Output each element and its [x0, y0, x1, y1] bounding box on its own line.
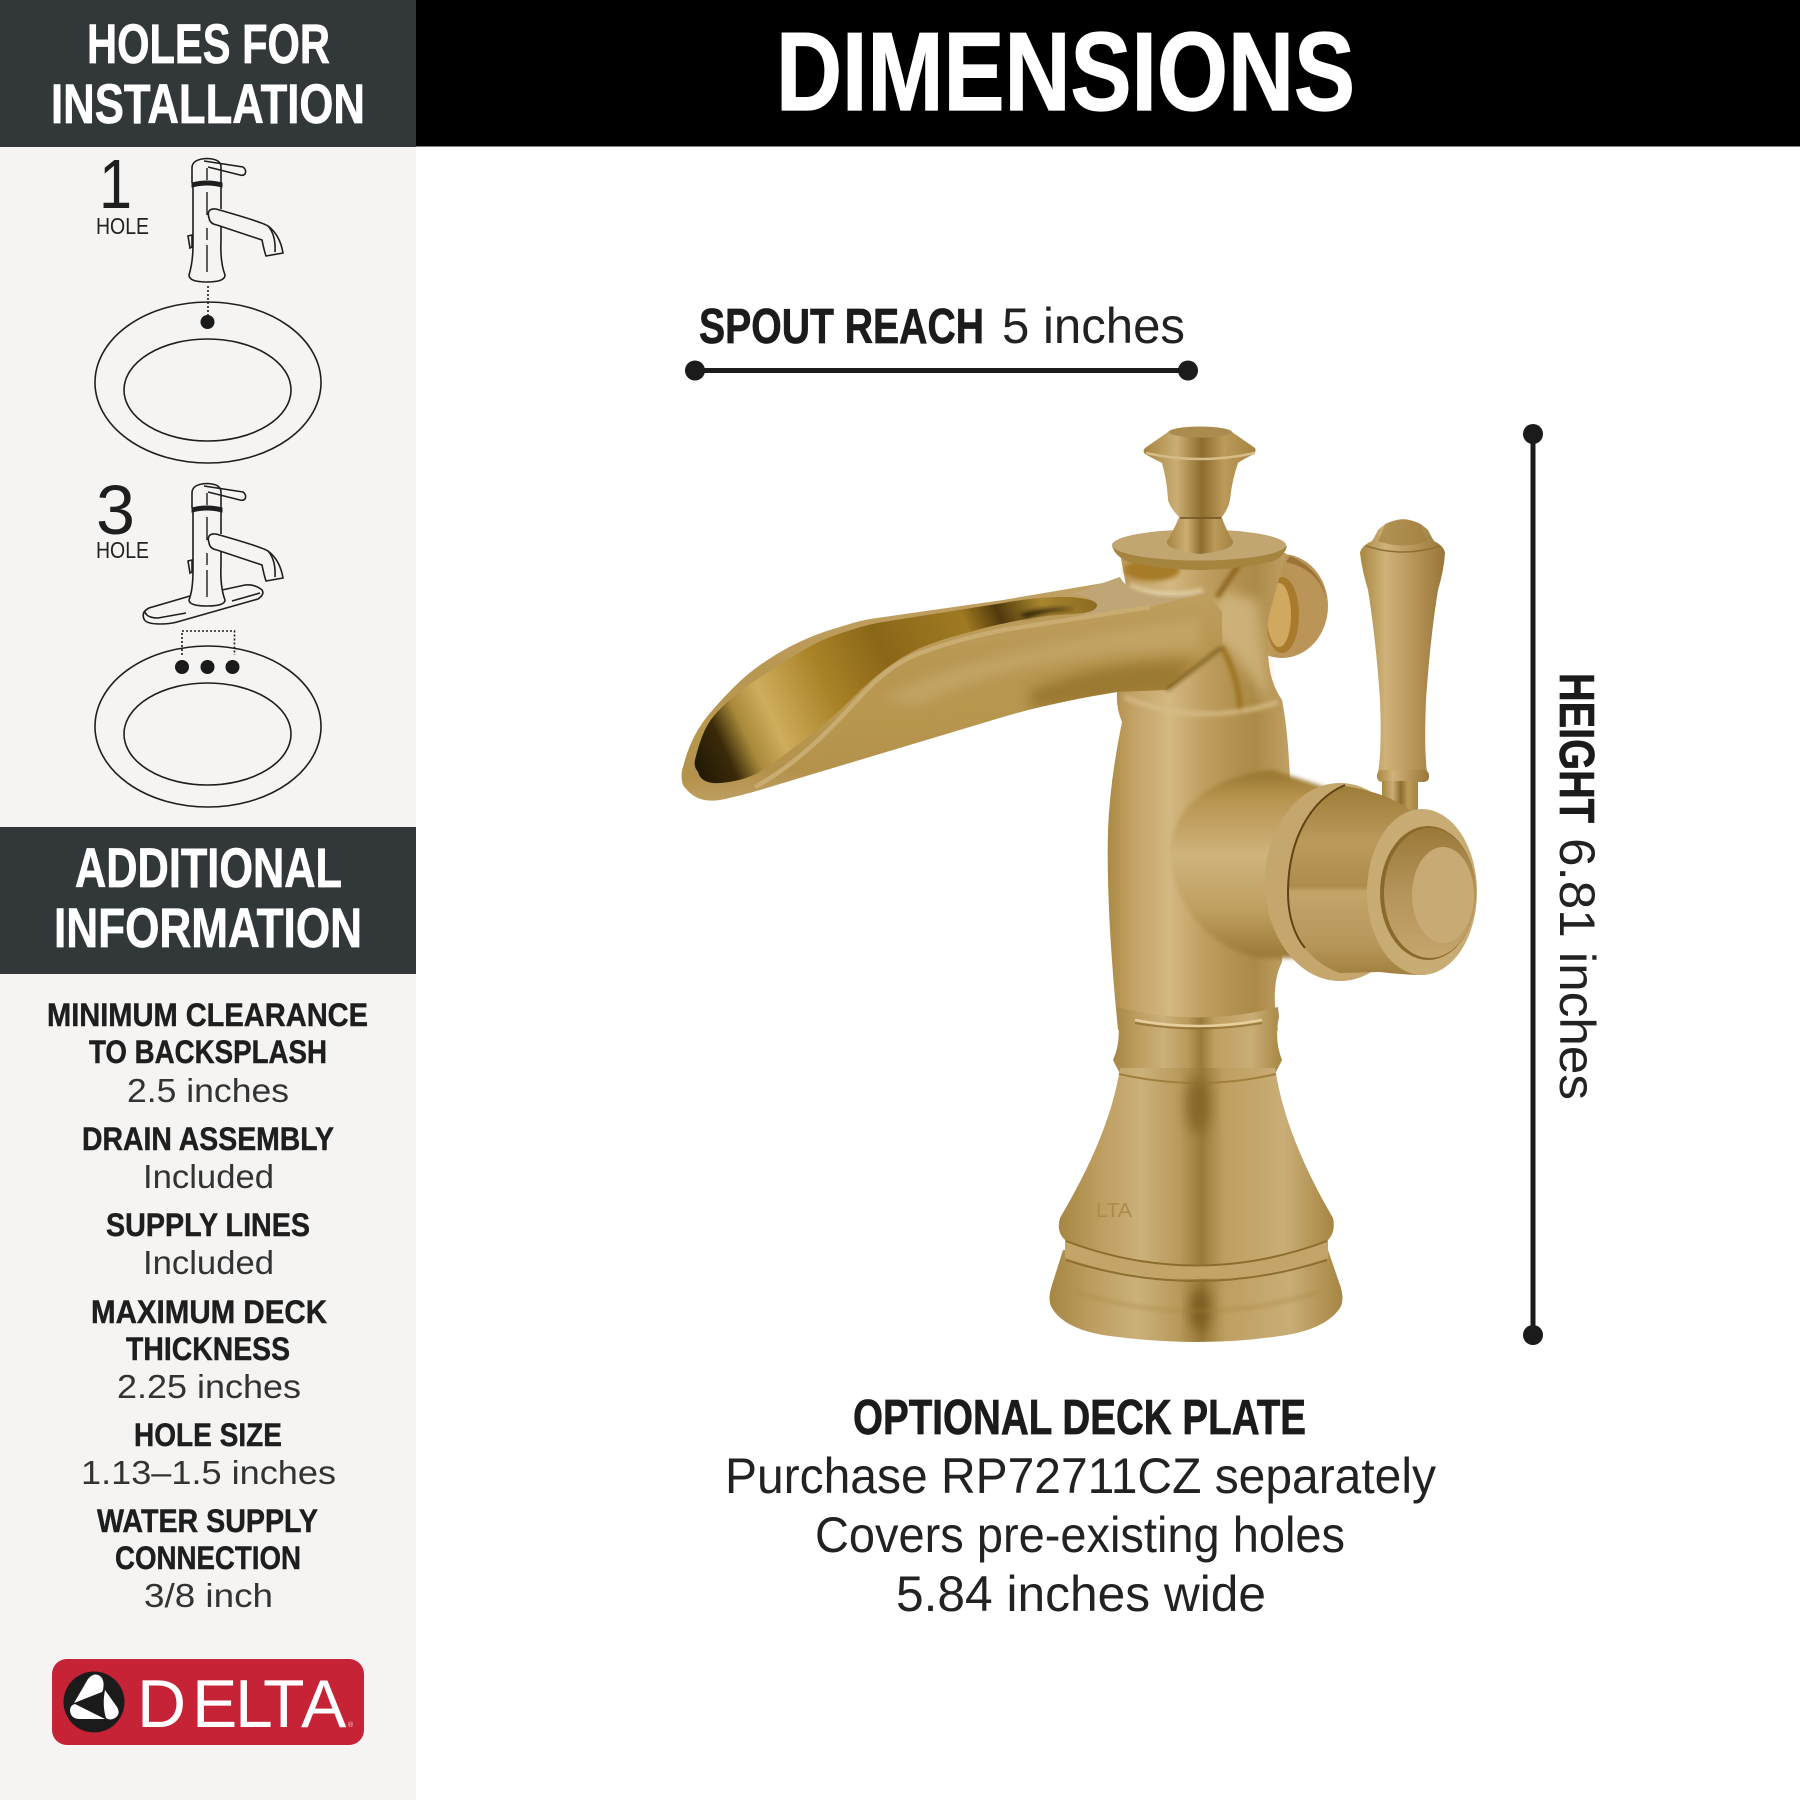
- collar and bell base: [1050, 1007, 1342, 1342]
- base shading: [1186, 1077, 1210, 1332]
- dimension: height: 6.81 inches: [1549, 838, 1605, 1100]
- text block: additional information specs: [47, 997, 368, 1614]
- text block: optional deck plate: [725, 1390, 1436, 1622]
- label: 1 hole: 1: [99, 145, 132, 223]
- spec: water supply connection: WATER SUPPLY: [97, 1503, 318, 1539]
- spec: maximum deck thickness: [91, 1294, 327, 1405]
- three hole diagram: [95, 471, 321, 807]
- icon: single hole faucet: [188, 158, 283, 315]
- label: 3 hole: [96, 471, 149, 563]
- spec: supply lines: Included: [143, 1244, 274, 1281]
- icon: sink with three holes: [95, 646, 321, 807]
- spec: supply lines: [106, 1207, 310, 1281]
- label: 1 hole: HOLE: [96, 213, 149, 239]
- collar and bell base: LTA: [1096, 1200, 1133, 1222]
- text block: optional deck plate: OPTIONAL DECK PLATE: [853, 1390, 1306, 1445]
- dimension: height: HEIGHT: [1549, 673, 1604, 823]
- label: 3 hole: HOLE: [96, 537, 149, 563]
- spout shading: [880, 618, 1200, 710]
- icon: three hole faucet with deck plate: [143, 484, 283, 655]
- spec: drain assembly: [82, 1121, 334, 1195]
- spec: water supply connection: [97, 1503, 318, 1614]
- spec: maximum deck thickness: THICKNESS: [126, 1331, 290, 1367]
- spec: supply lines: SUPPLY LINES: [106, 1207, 310, 1243]
- heading: additional information: [0, 827, 416, 974]
- spec: maximum deck thickness: 2.25 inches: [117, 1368, 301, 1405]
- foot: [1050, 1250, 1342, 1342]
- dimension: spout reach: [685, 298, 1198, 380]
- spec: minimum clearance: TO BACKSPLASH: [89, 1034, 327, 1070]
- dimension: spout reach: 5 inches: [1002, 298, 1185, 354]
- spec: minimum clearance: 2.5 inches: [127, 1072, 289, 1109]
- text block: optional deck plate: Purchase RP72711CZ separately: [725, 1448, 1436, 1504]
- top disk and finial: [1112, 426, 1287, 570]
- spec: drain assembly: Included: [143, 1158, 274, 1195]
- heading: holes for installation: HOLES FOR: [87, 12, 330, 75]
- spec: hole size: [81, 1417, 336, 1491]
- spec: minimum clearance: [47, 997, 368, 1109]
- spec: water supply connection: CONNECTION: [115, 1540, 301, 1576]
- spout: [682, 577, 1222, 801]
- spec: drain assembly: DRAIN ASSEMBLY: [82, 1121, 334, 1157]
- spec: minimum clearance: MINIMUM CLEARANCE: [47, 997, 368, 1033]
- product image: gold faucet: [682, 426, 1477, 1342]
- handle hub: [1170, 770, 1477, 981]
- ring: [1065, 1235, 1328, 1279]
- panel: left sidebar: [0, 0, 416, 1800]
- text block: optional deck plate: Covers pre-existing holes: [815, 1507, 1345, 1563]
- heading: additional information: INFORMATION: [54, 896, 362, 959]
- heading: holes for installation: INSTALLATION: [51, 72, 365, 135]
- spec: maximum deck thickness: MAXIMUM DECK: [91, 1294, 327, 1330]
- dimension: spout reach: SPOUT REACH: [699, 299, 984, 354]
- main body column and neck: [1108, 553, 1290, 1030]
- icon: sink with one hole: [95, 302, 321, 463]
- label: 3 hole: 3: [96, 471, 135, 549]
- lever handle: [1360, 519, 1445, 817]
- spec: hole size: 1.13–1.5 inches: [81, 1454, 336, 1491]
- logo: Delta: ®: [348, 1721, 354, 1729]
- logo: Delta: DELTA: [137, 1666, 347, 1742]
- back knob: [1236, 554, 1328, 658]
- spec: water supply connection: 3/8 inch: [144, 1577, 273, 1614]
- one hole diagram: [95, 145, 321, 463]
- title bar: dimensions: DIMENSIONS: [776, 10, 1355, 134]
- heading: additional information: ADDITIONAL: [75, 836, 342, 899]
- heading: holes for installation: [0, 0, 416, 147]
- label: 1 hole: [96, 145, 149, 239]
- dimension: height: [1523, 424, 1605, 1345]
- text block: optional deck plate: 5.84 inches wide: [896, 1566, 1266, 1622]
- logo: Delta: [52, 1659, 364, 1745]
- title bar: dimensions: [416, 0, 1800, 146]
- spec: hole size: HOLE SIZE: [134, 1417, 282, 1453]
